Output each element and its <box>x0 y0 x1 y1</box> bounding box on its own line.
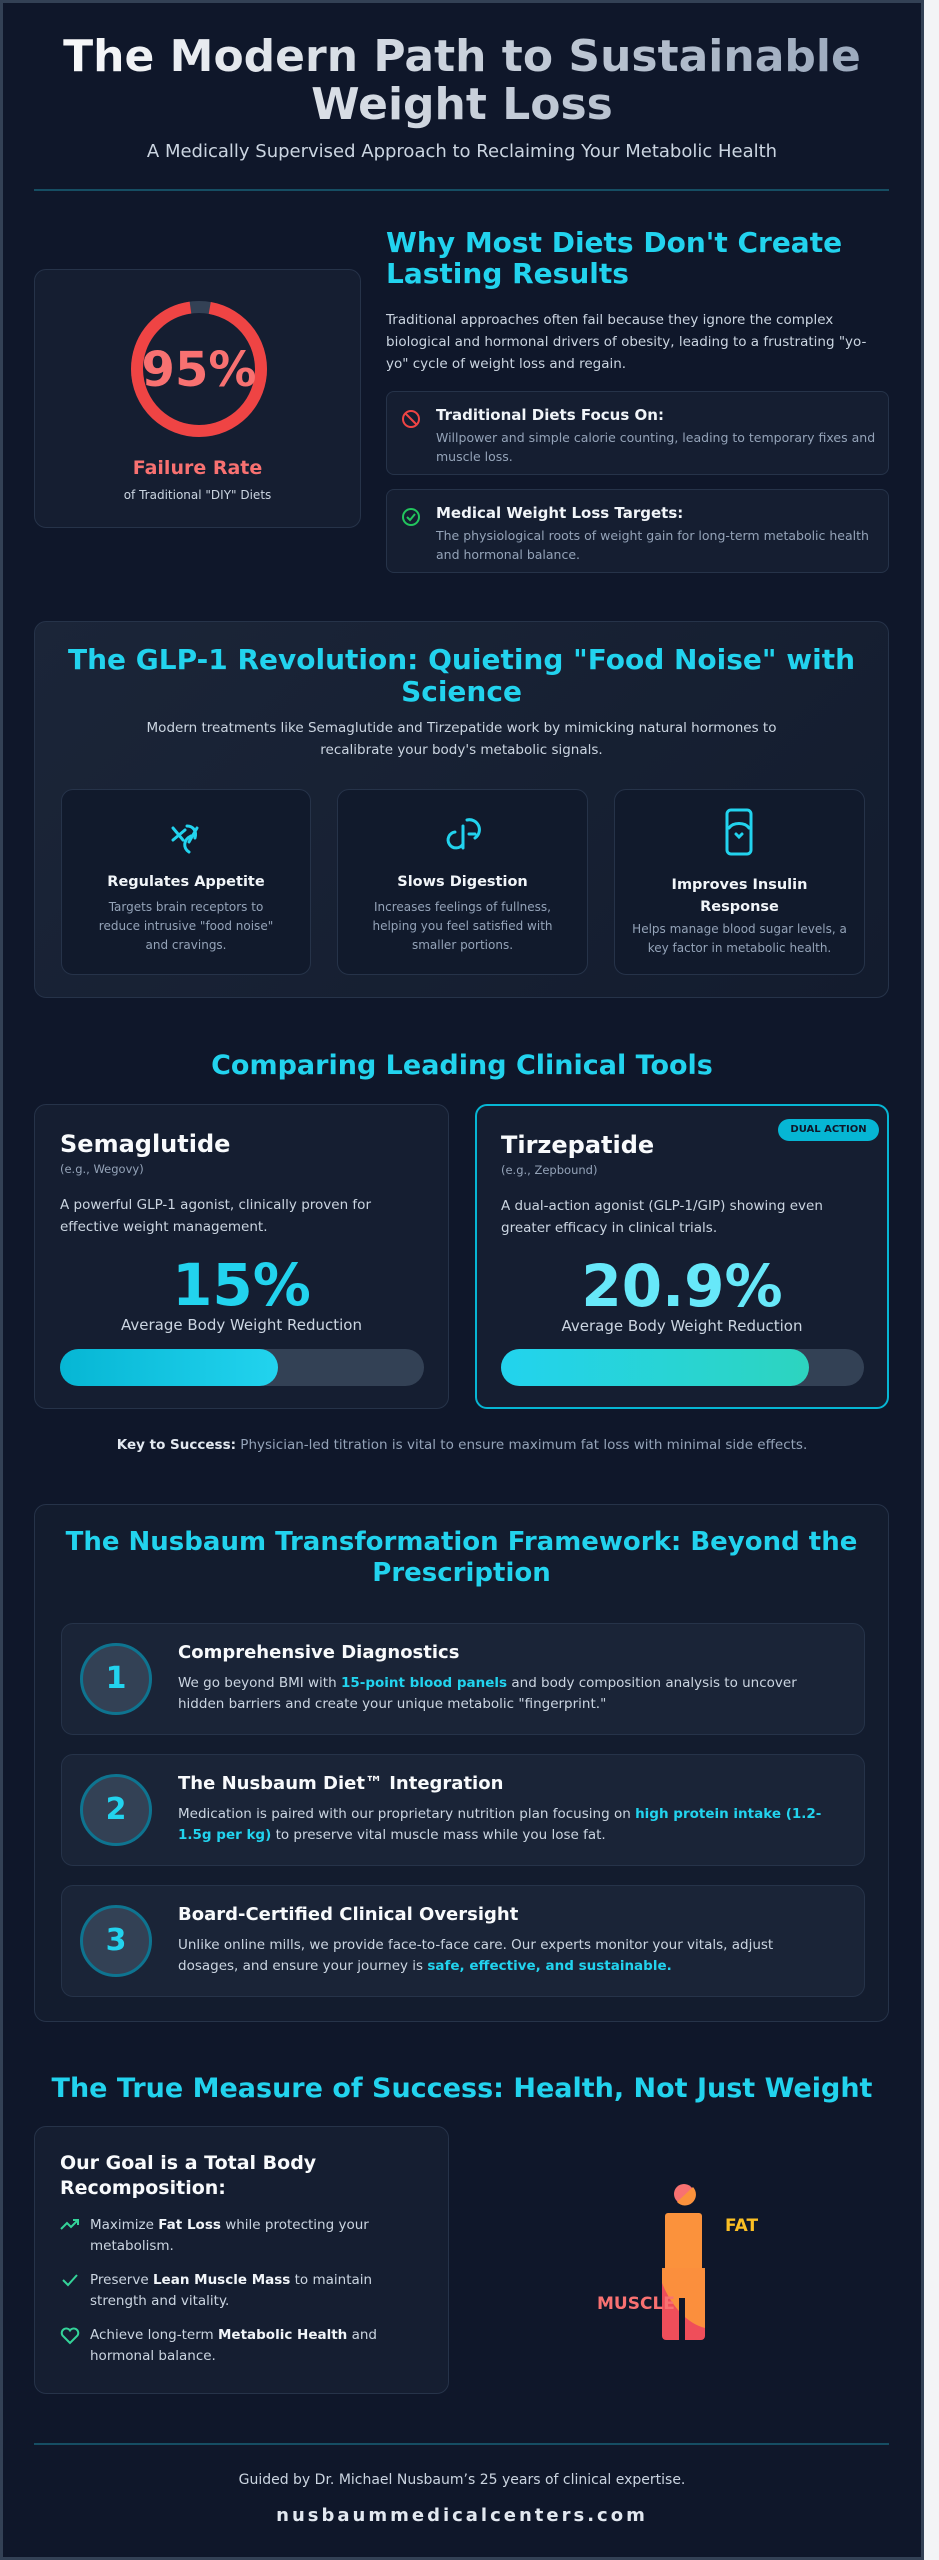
item: metabolic health: Achieve long-term Metabolic Health and hormonal balance. <box>90 2327 377 2364</box>
card: slows digestion <box>337 789 588 975</box>
box: medical weight loss: The physiological roots of weight gain for long-term metabolic health and hormonal balance. <box>436 528 869 562</box>
bar: 20.9% <box>501 1349 864 1386</box>
figure: body composition <box>597 2184 758 2340</box>
badge 3: 3 <box>106 1923 126 1958</box>
label: failure rate: Failure Rate <box>133 457 262 479</box>
badge 1: 1 <box>106 1661 126 1696</box>
card: semaglutide: Semaglutide <box>60 1130 230 1158</box>
stat: 20.9%: 20.9% <box>581 1252 783 1320</box>
badge 2 <box>80 1774 152 1846</box>
icon: ban <box>402 410 420 428</box>
donut chart 95% <box>131 301 267 437</box>
card: tirzepatide: Average Body Weight Reduction <box>561 1317 802 1335</box>
heading: comparing tools: Comparing Leading Clinical Tools <box>211 1050 713 1081</box>
badge 1 <box>80 1643 152 1715</box>
badge: dual action: DUAL ACTION <box>790 1124 867 1135</box>
icon: phone/insulin <box>726 808 752 856</box>
caption: of Traditional "DIY" Diets <box>124 488 271 502</box>
item: fat loss: Maximize Fat Loss while protecting your metabolism. <box>90 2217 369 2254</box>
icon: appetite <box>171 824 199 854</box>
card: regulates appetite: Targets brain receptors to reduce intrusive "food noise" and cravings. <box>99 900 273 952</box>
figure: body composition: MUSCLE <box>597 2294 675 2314</box>
panel: GLP-1 revolution <box>34 621 889 998</box>
card: tirzepatide: Tirzepatide <box>501 1131 654 1159</box>
item: lean muscle: Preserve Lean Muscle Mass to maintain strength and vitality. <box>90 2272 372 2309</box>
card: total body recomposition <box>34 2126 449 2394</box>
title <box>3 33 921 129</box>
card: tirzepatide: (e.g., Zepbound) <box>501 1163 597 1177</box>
step 2: The Nusbaum Diet™ Integration <box>178 1773 503 1794</box>
panel: transformation framework <box>34 1504 889 2022</box>
card: insulin response: Helps manage blood sugar levels, a key factor in metabolic health. <box>632 922 847 955</box>
card: tirzepatide: A dual-action agonist (GLP-1/GIP) showing even greater efficacy in clinical trials. <box>501 1198 823 1236</box>
card: insulin response: Response <box>700 899 779 915</box>
card: slows digestion: Increases feelings of fullness, helping you feel satisfied with smaller portions. <box>372 900 553 952</box>
card: regulates appetite <box>61 789 311 975</box>
card: semaglutide: (e.g., Wegovy) <box>60 1162 144 1176</box>
badge: dual action <box>778 1119 879 1141</box>
panel: failure rate stat <box>34 269 361 528</box>
subtitle: A Medically Supervised Approach to Reclaiming Your Metabolic Health <box>147 141 777 162</box>
box: traditional diets: Traditional Diets Focus On: <box>436 406 664 424</box>
title: The Modern Path to Sustainable <box>63 31 861 82</box>
key to success note: Key to Success: Physician-led titration is vital to ensure maximum fat loss with minimal side effects. <box>117 1437 807 1453</box>
step 3: Board-Certified Clinical Oversight <box>178 1904 518 1925</box>
card: regulates appetite: Regulates Appetite <box>107 874 265 890</box>
description: Modern treatments like Semaglutide and Tirzepatide work by mimicking natural hormones to recalibrate your body's metabolic signals. <box>147 720 776 758</box>
heading: The Nusbaum Transformation Framework: Beyond the Prescription <box>66 1527 857 1588</box>
card: semaglutide: Average Body Weight Reduction <box>121 1316 362 1334</box>
card: insulin response: Improves Insulin <box>672 877 807 893</box>
heading: The GLP-1 Revolution: Quieting "Food Noise" with Science <box>68 643 855 708</box>
step 1 <box>61 1623 865 1735</box>
step 2: Medication is paired with our proprietary nutrition plan focusing on high protein intake (1.2-1.5g per kg) to preserve vital muscle mass while you lose fat. <box>178 1806 821 1843</box>
box: traditional diets: Willpower and simple calorie counting, leading to temporary fixes and muscle loss. <box>436 430 875 464</box>
paragraph: Traditional approaches often fail because they ignore the complex biological and hormonal drivers of obesity, leading to a frustrating "yo-yo" cycle of weight loss and regain. <box>386 312 866 372</box>
step 1: Comprehensive Diagnostics <box>178 1642 459 1663</box>
badge 3 <box>80 1905 152 1977</box>
bar: 15% <box>60 1349 424 1386</box>
card: slows digestion: Slows Digestion <box>397 874 528 890</box>
stat: 15%: 15% <box>172 1251 311 1319</box>
badge 2: 2 <box>106 1792 126 1827</box>
box: traditional diets <box>386 391 889 475</box>
card: semaglutide: A powerful GLP-1 agonist, clinically proven for effective weight management. <box>60 1197 371 1235</box>
donut chart 95%: 95% <box>142 342 256 398</box>
heading: true measure of success: The True Measure of Success: Health, Not Just Weight <box>52 2073 872 2104</box>
footer text: Guided by Dr. Michael Nusbaum’s 25 years of clinical expertise. <box>239 2472 685 2488</box>
step 3 <box>61 1885 865 1997</box>
heading: why diets fail: Why Most Diets Don't Create Lasting Results <box>386 226 842 290</box>
figure: body composition: FAT <box>725 2216 758 2236</box>
footer url: nusbaummedicalcenters.com <box>276 2505 648 2526</box>
step 2 <box>61 1754 865 1866</box>
card: tirzepatide <box>475 1104 889 1409</box>
icon: check circle <box>402 508 420 526</box>
box: medical weight loss: Medical Weight Loss Targets: <box>436 504 683 522</box>
title: Weight Loss <box>311 79 613 130</box>
step 1: We go beyond BMI with 15-point blood panels and body composition analysis to uncover hidden barriers and create your unique metabolic "fingerprint." <box>178 1675 797 1712</box>
icon: digestion <box>446 818 481 850</box>
card: total body recomposition: Our Goal is a Total Body Recomposition: <box>60 2152 316 2199</box>
box: medical weight loss <box>386 489 889 573</box>
card: semaglutide <box>34 1104 449 1409</box>
card: insulin response <box>614 789 865 975</box>
step 3: Unlike online mills, we provide face-to-face care. Our experts monitor your vitals, adjust dosages, and ensure your journey is safe, effective, and sustainable. <box>178 1937 773 1974</box>
